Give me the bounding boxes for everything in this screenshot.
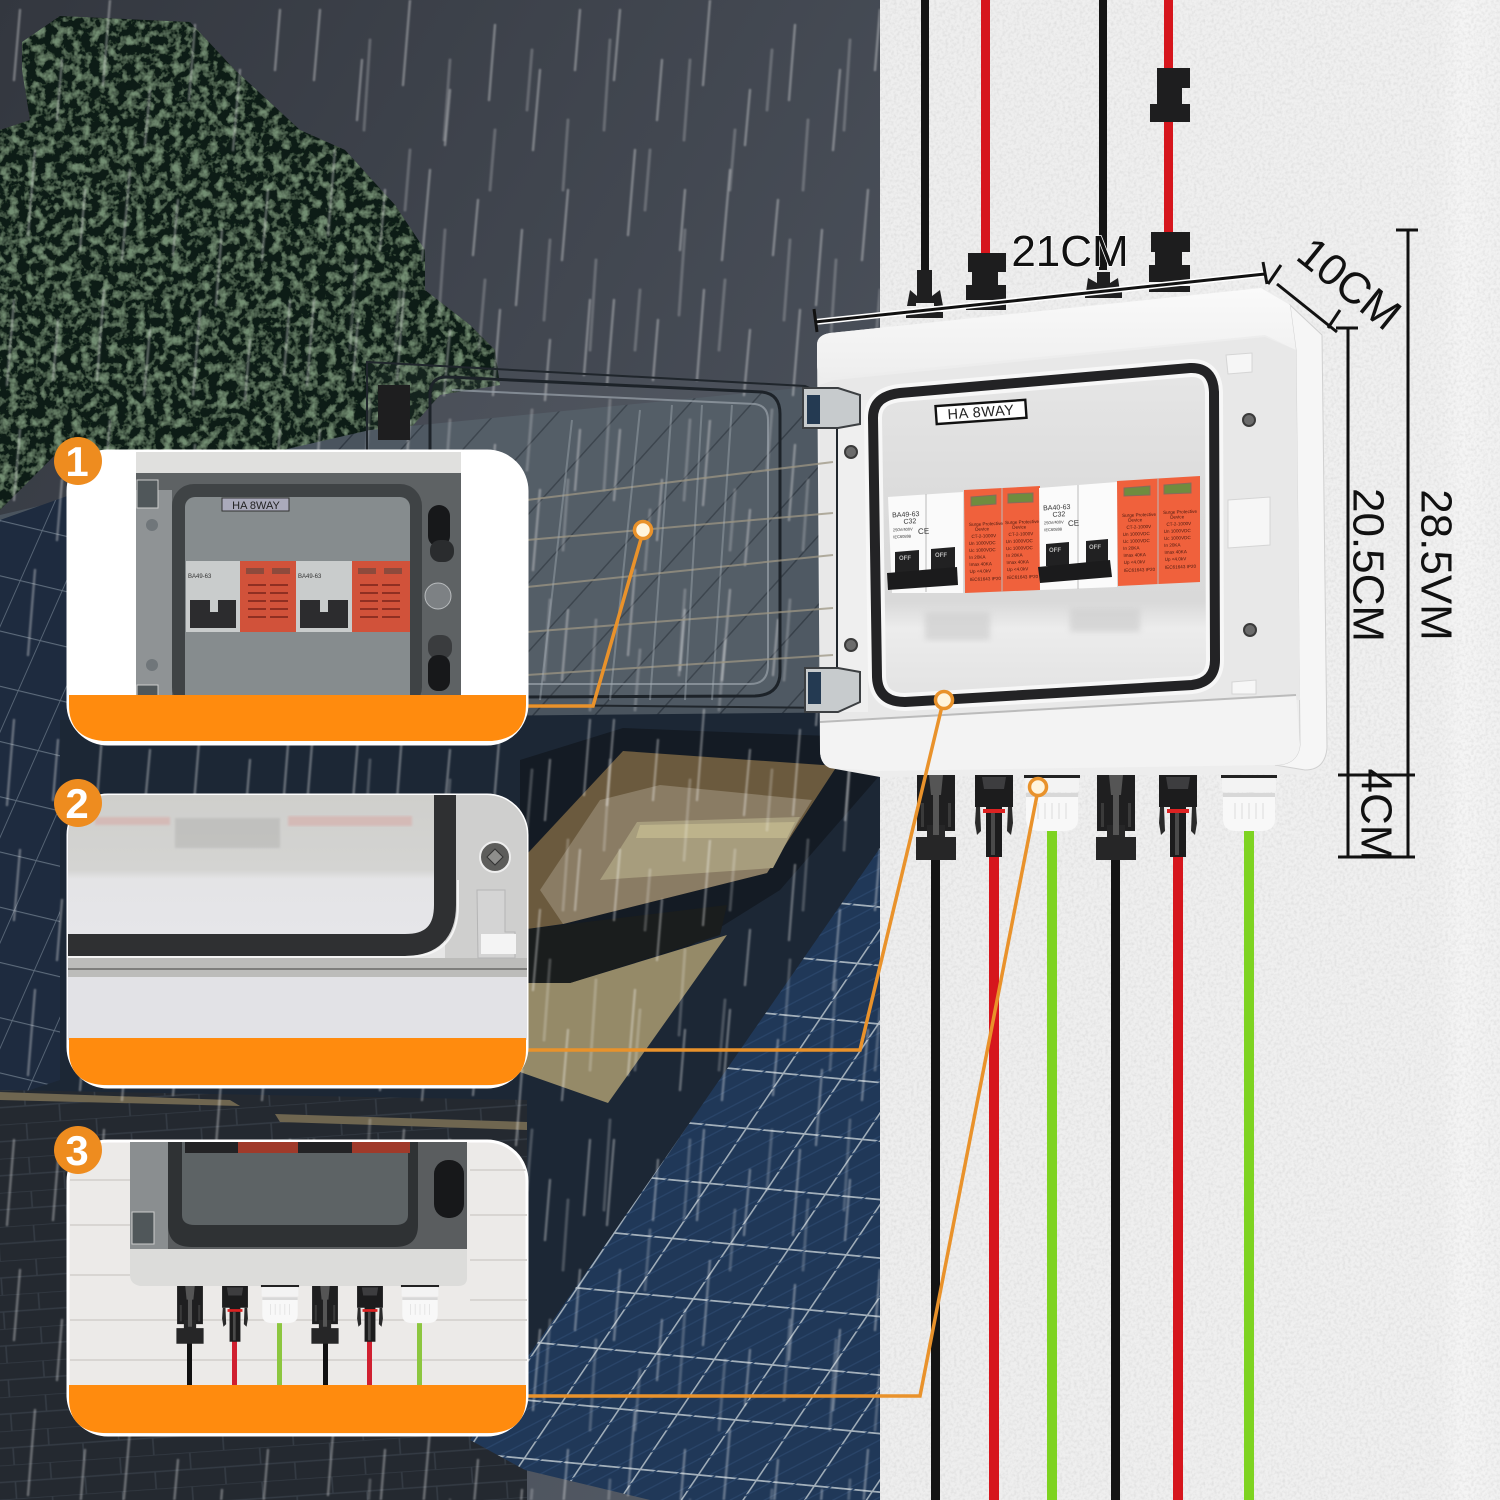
- surge text: Up <4.0kV: [1124, 559, 1146, 565]
- leader dot 3: [1030, 778, 1046, 796]
- panel 1: HA 8WAY: [232, 500, 280, 512]
- breaker text 1: BA49-63: [892, 511, 920, 519]
- surge text: Imax 40KA: [1123, 552, 1147, 558]
- surge text: Uc 1000VDC: [1123, 538, 1150, 544]
- panel 3 latch: [434, 1160, 464, 1218]
- surge text: IEC61643 IP20: [970, 576, 1002, 582]
- wall: [880, 0, 1500, 1500]
- surge text: Uc 1000VDC: [969, 547, 996, 553]
- panel 1 breakers: [186, 561, 410, 632]
- enclosure box: [817, 288, 1327, 777]
- panel 2 right frame: [445, 795, 527, 958]
- cables top: [906, 0, 1190, 318]
- background: brown strips: [0, 1092, 527, 1130]
- surge text: CT-2-1000V: [971, 533, 997, 539]
- inner tray: [873, 368, 1215, 702]
- dimension: height 4CM: 4CM: [1352, 769, 1400, 861]
- surge text: Imax 40KA: [969, 561, 993, 567]
- background: dark roof mid: [0, 712, 880, 1500]
- panel 3 lower band: [130, 1249, 467, 1286]
- connector inline on red cable: [1150, 68, 1190, 122]
- breaker text 1: C32: [903, 518, 917, 526]
- breaker text 2: BA40-63: [1043, 504, 1071, 512]
- clips: [1226, 353, 1270, 694]
- dimension: width 21CM: [814, 227, 1267, 332]
- connector top 2: [966, 253, 1006, 310]
- label: [935, 400, 1027, 424]
- surge text: Un 1000VDC: [1123, 531, 1151, 537]
- panel 3 orange bar: [69, 1385, 526, 1433]
- badge 3: [54, 1126, 102, 1174]
- breaker 1 white: [888, 492, 963, 593]
- breaker 2 white: [1039, 482, 1117, 590]
- module dividers: [926, 478, 1158, 592]
- switches right: OFF: [1089, 545, 1101, 551]
- panel 1 box: [136, 452, 461, 473]
- connector top 1: [906, 270, 943, 318]
- background: left solar panel: [0, 495, 260, 1100]
- panel 2 orange bar: [69, 1038, 526, 1085]
- breaker text 1: 250V/400V: [893, 526, 913, 532]
- surge text: In 20KA: [1123, 545, 1141, 551]
- surge text: Up <4.0kV: [1007, 566, 1029, 572]
- label: HA 8WAY: [947, 403, 1015, 423]
- frame: [820, 337, 1300, 720]
- top lid band: [817, 288, 1296, 378]
- connector top 4: [1149, 232, 1190, 292]
- screws: [845, 414, 1256, 651]
- leader line 2: [525, 702, 943, 1050]
- door latch: [378, 385, 410, 440]
- panel 3 modules: [185, 1142, 352, 1153]
- leader dot 1: [634, 522, 652, 538]
- badge 3: 3: [65, 1127, 89, 1174]
- panel 1 breakers: BA49-63: [188, 574, 212, 580]
- surge text: Surge Protective: [969, 521, 1003, 527]
- surge text: Device: [975, 526, 990, 532]
- cables bottom: [931, 825, 1254, 1500]
- surge text: Imax 40KA: [1164, 549, 1188, 555]
- badge 2: 2: [65, 780, 89, 827]
- surge text: Uc 1000VDC: [1164, 535, 1191, 541]
- background: heavier rain: [330, 0, 880, 1500]
- background: skylight window: [520, 728, 880, 1103]
- surge text: In 20KA: [1006, 552, 1024, 558]
- badge 1: 1: [65, 438, 89, 485]
- panel 1 window: [172, 484, 422, 709]
- background: slate roof: [0, 380, 880, 730]
- panel 1 orange bar: [69, 695, 526, 741]
- panel 2 screw: [480, 842, 510, 872]
- breaker text 2: IEC60898: [1044, 526, 1063, 532]
- panel 1 breakers: BA49-63: [298, 574, 322, 580]
- dimension: total 28.5VM: 28.5VM: [1412, 489, 1460, 641]
- switches left: OFF: [899, 556, 911, 562]
- leader line 1: [525, 532, 643, 706]
- breaker text 2: 250V/400V: [1044, 519, 1064, 525]
- breaker text 1: CE: [918, 527, 929, 536]
- surge windows: [971, 483, 1191, 506]
- panel 2 pink tint: [95, 816, 412, 826]
- dimension: width 21CM: 21CM: [1011, 227, 1129, 276]
- door hinges: [803, 388, 860, 712]
- background: rain: [0, 0, 880, 1500]
- panel 3 brick lines: [70, 1170, 527, 1360]
- panel 3 window: [168, 1142, 418, 1247]
- leader dot 2: [936, 692, 952, 708]
- panel 2 gasket: [68, 795, 445, 945]
- surge text: In 20KA: [1164, 542, 1182, 548]
- panel 1: [68, 451, 527, 744]
- surge text: CT-2-1000V: [1008, 531, 1034, 537]
- panel 2 clip: [477, 890, 515, 958]
- badge 1: [54, 437, 102, 485]
- breaker text 2: C32: [1052, 511, 1066, 519]
- badge 2: [54, 779, 102, 827]
- background: lower left shingles: [0, 1090, 527, 1500]
- panel 2 interior: [68, 795, 440, 945]
- panel 1 label: [222, 498, 289, 511]
- panel 1 screws: [146, 519, 158, 531]
- door window frame: [430, 377, 780, 697]
- surge text: Surge Protective: [1122, 512, 1156, 518]
- breaker text 2: CE: [1068, 519, 1079, 528]
- panel 3 hinge: [132, 1212, 154, 1244]
- surge text: Un 1000VDC: [1006, 538, 1034, 544]
- surge text: CT-2-1000V: [1166, 521, 1192, 527]
- background: stormy sky: [0, 0, 880, 1500]
- panel 3 connectors: [176, 1285, 439, 1344]
- surge 2 orange: [1117, 476, 1200, 586]
- reflected tile lines: [527, 462, 833, 675]
- gasket: [873, 368, 1215, 702]
- surge text: CT-2-1000V: [1126, 524, 1152, 530]
- surge text: Un 1000VDC: [1164, 528, 1191, 534]
- panel 3 box: [168, 1142, 467, 1249]
- dimension: height 20.5CM: 20.5CM: [1344, 488, 1392, 642]
- surge text: Device: [1128, 517, 1143, 523]
- panel 1 hinges: [137, 480, 158, 698]
- panel 3: [68, 1141, 527, 1435]
- dimension: total 28.5VM: [1396, 230, 1460, 857]
- panel 2: [68, 795, 527, 1087]
- surge text: Up <4.0kV: [970, 568, 992, 574]
- switches right: OFF: [1049, 548, 1061, 554]
- surge text: IEC61643 IP20: [1124, 567, 1156, 573]
- surge text: Un 1000VDC: [969, 540, 996, 546]
- panel 2 frame bottom: [68, 958, 527, 977]
- connector top 3: [1085, 272, 1122, 298]
- surge text: Uc 1000VDC: [1006, 545, 1034, 551]
- leader line 3: [525, 790, 1038, 1396]
- surge text: Up <4.0kV: [1165, 556, 1187, 562]
- surge text: [968, 509, 1199, 582]
- surge text: Device: [1170, 514, 1185, 520]
- panel 1 connectors: [425, 505, 454, 691]
- background: tree: [0, 16, 500, 510]
- transparent door: [367, 362, 860, 712]
- bottom connectors: [916, 775, 1277, 860]
- panel 3 cables: [187, 1320, 422, 1386]
- surge text: Imax 40KA: [1006, 559, 1030, 565]
- box side and outer shell: [817, 288, 1327, 777]
- surge text: IEC61643 IP20: [1007, 574, 1039, 580]
- surge text: Surge Protective: [1163, 509, 1197, 515]
- bottom band: [820, 695, 1300, 771]
- background: large solar panel: [470, 848, 880, 1500]
- dimension: depth 10CM: 10CM: [1288, 228, 1410, 340]
- dimension: height 20.5CM: [1336, 328, 1415, 857]
- switches left: OFF: [935, 553, 947, 559]
- switches right: [1038, 539, 1112, 583]
- breaker text 1: IEC60898: [893, 533, 912, 539]
- breaker text 2: [1043, 504, 1079, 532]
- surge 1 orange: [964, 486, 1040, 593]
- surge text: IEC61643 IP20: [1165, 564, 1197, 570]
- tray smudges: [925, 608, 1140, 640]
- surge text: In 20KA: [969, 554, 986, 560]
- breaker text 1: [892, 511, 929, 539]
- switches left: [887, 547, 958, 590]
- surge text: Device: [1012, 524, 1027, 530]
- surge text: Surge Protective: [1005, 519, 1040, 525]
